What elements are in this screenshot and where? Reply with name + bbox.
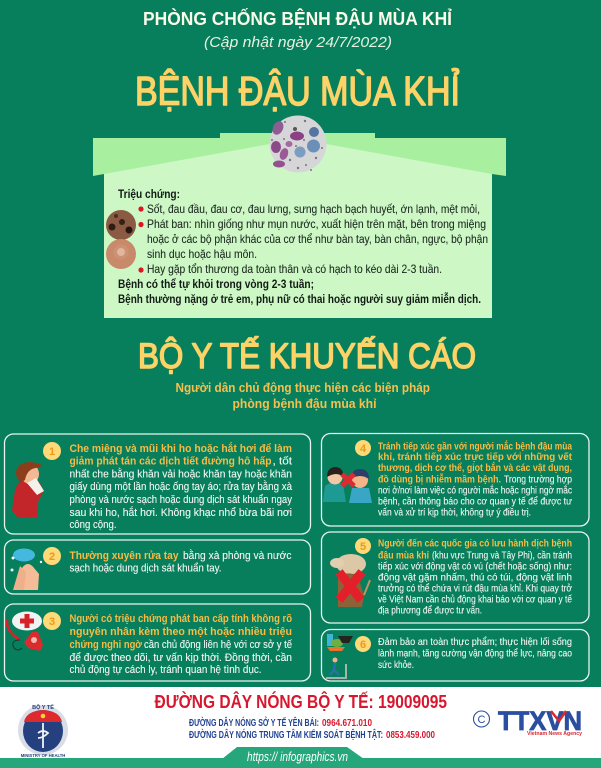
icon: two people with red cross [323, 467, 372, 503]
disease course notes: Bệnh có thể tự khỏi trong vòng 2-3 tuần; [118, 277, 314, 291]
symptom list: Hay gặp tổn thương da toàn thân và có hạch to kéo dài 2-3 tuần. [147, 262, 442, 276]
disease course notes [118, 277, 481, 306]
text: recommendation 5 [378, 538, 572, 616]
text: recommendation 3: Người có triệu chứng phát ban cấp tính không rõ [70, 613, 292, 625]
text: recommendation 6: sức khỏe. [378, 659, 414, 671]
symptom list: Phát ban: nhìn giống như mụn nước, xuất hiện trên mặt, bên trong miệng [147, 217, 486, 231]
bullet markers [138, 206, 144, 273]
hotline heading: ĐƯỜNG DÂY NÓNG BỘ Y TẾ: 19009095 [154, 691, 447, 712]
text: recommendation 3: để được theo dõi, tư vấn kịp thời. Đồng thời, cần [70, 652, 292, 664]
badge: 5: 5 [360, 541, 366, 553]
text: recommendation 1: , tốt [272, 456, 293, 468]
logo: ministry of health: MINISTRY OF HEALTH [21, 753, 65, 758]
photo: rash close-up [106, 239, 136, 269]
section subheading [176, 381, 430, 411]
text: recommendation 4 [378, 440, 572, 518]
header: update date: (Cập nhật ngày 24/7/2022) [204, 34, 392, 51]
text: recommendation 3: chủ động tự cách ly, tránh quan hệ tình dục. [70, 664, 262, 676]
icon: rodent with red cross [330, 554, 370, 607]
text: recommendation 3: nguyên nhân kèm theo một hoặc nhiều triệu [70, 626, 292, 638]
text: recommendation 4: vấn và xử trí kịp thời, không tự ý điều trị. [378, 506, 531, 518]
icon: virus micrograph [270, 116, 326, 172]
panel: recommendation 1 [4, 434, 310, 534]
panel: recommendation 4 [322, 434, 589, 526]
logo: copyright TTXVN: Vietnam News Agency [527, 731, 582, 737]
logo: ministry of health: BỘ Y TẾ [32, 703, 54, 711]
badge: 5 [355, 538, 371, 554]
symptoms heading: Triệu chứng: [118, 187, 180, 201]
text: recommendation 6 [378, 636, 572, 671]
text: recommendation 2: bằng xà phòng và nước [183, 549, 292, 562]
icon: phone and medical cross [7, 612, 43, 651]
text: recommendation 3: cần chủ động liên hệ với cơ sở y tế [144, 639, 293, 651]
text: recommendation 1: Che miệng và mũi khi ho hoặc hắt hơi để làm [70, 442, 292, 455]
panel body [104, 144, 492, 318]
text: recommendation 1: phòng và nước sạch hoặc dung dịch sát khuẩn ngay [70, 494, 292, 506]
website tab [222, 747, 364, 764]
logo: ministry of health [18, 703, 68, 758]
hotline numbers: ĐƯỜNG DÂY NÓNG SỞ Y TẾ YÊN BÁI: [189, 716, 319, 729]
badge: 3: 3 [49, 616, 55, 628]
text: recommendation 2: Thường xuyên rửa tay [70, 550, 179, 562]
badge: 2 [43, 547, 61, 565]
panel roof [93, 133, 506, 176]
text: recommendation 5: động vật gặm nhấm, thú có túi, động vật linh [378, 572, 572, 584]
hotline numbers: 0853.459.000 [386, 730, 435, 741]
logo: copyright TTXVN: C [478, 714, 486, 726]
text: recommendation 2: sạch hoặc dung dịch sát khuẩn tay. [70, 562, 222, 574]
hotline numbers: 0964.671.010 [322, 718, 372, 729]
text: recommendation 1: giấy dùng một lần hoặc ống tay áo; rửa tay bằng xà [70, 480, 293, 493]
panel: recommendation 5 [322, 532, 589, 623]
text: recommendation 2 [70, 549, 292, 574]
hotline numbers: ĐƯỜNG DÂY NÓNG TRUNG TÂM KIỂM SOÁT BỆNH TẬT: [189, 728, 383, 741]
panel: recommendation 6 [322, 630, 589, 681]
text: recommendation 1: công cộng. [70, 519, 116, 531]
symptom list: hoặc ở các bộ phận khác của cơ thể như bàn tay, bàn chân, ngực, bộ phận [147, 232, 488, 246]
badge: 3 [43, 612, 61, 630]
text: recommendation 4: đồ dùng bị nhiễm mầm bệnh. [378, 472, 501, 486]
main heading: BỆNH ĐẬU MÙA KHỈ [135, 68, 460, 114]
icon: person sneezing [12, 462, 44, 517]
badge: 4 [355, 440, 371, 456]
text: recommendation 5: tiếp xúc với động vật có vú (chết hoặc sống) như: [378, 560, 572, 572]
text: recommendation 1: nhất che bằng khăn vải hoặc khăn tay hoặc khăn [70, 468, 292, 480]
symptom list: sinh dục hoặc hậu môn. [147, 247, 257, 261]
badge: 1 [43, 442, 61, 460]
panel: recommendation 2 [4, 540, 310, 594]
footer band [0, 758, 601, 768]
text: recommendation 3: chứng nghi ngờ [70, 639, 143, 651]
hotline numbers [189, 716, 435, 741]
section heading: BỘ Y TẾ KHUYẾN CÁO [138, 336, 476, 376]
photo: skin lesions [106, 210, 136, 240]
panel: recommendation 3 [4, 604, 310, 681]
footer background [0, 687, 601, 759]
section subheading: phòng bệnh đậu mùa khỉ [232, 397, 377, 411]
badge: 2: 2 [49, 551, 55, 563]
text: recommendation 3 [70, 613, 293, 676]
badge: 6: 6 [360, 639, 366, 651]
logo: copyright TTXVN: TTXVN [498, 706, 582, 736]
disease course notes: Bệnh thường nặng ở trẻ em, phụ nữ có thai hoặc người suy giảm miễn dịch. [118, 292, 481, 306]
icon: washing hands [10, 548, 42, 590]
text: recommendation 1 [70, 442, 293, 531]
symptom list: Sốt, đau đầu, đau cơ, đau lưng, sưng hạch bạch huyết, ớn lạnh, mệt mỏi, [147, 202, 480, 216]
badge: 1: 1 [49, 446, 55, 458]
text: recommendation 4: thương, dịch cơ thể, giọt bắn và các vật dụng, [378, 461, 572, 474]
text: recommendation 1: sau khi ho, hắt hơi. Không khạc nhổ bừa bãi nơi [70, 506, 292, 519]
text: recommendation 4: khỉ, tránh tiếp xúc trực tiếp với những vết [378, 451, 572, 463]
panel: symptoms [93, 116, 506, 318]
badge: 4: 4 [360, 443, 367, 455]
header: top title: PHÒNG CHỐNG BỆNH ĐẬU MÙA KHỈ [143, 8, 452, 29]
footer [0, 687, 601, 768]
text: recommendation 6: Đảm bảo an toàn thực phẩm; thực hiện lối sống [378, 636, 572, 648]
text: recommendation 4: Trong trường hợp [504, 474, 572, 486]
symptom list [147, 202, 488, 276]
text: recommendation 4: bệnh, cần thông báo cho cơ quan y tế để được tư [378, 496, 572, 508]
text: recommendation 1: giảm phát tán các dịch tiết đường hô hấp [70, 456, 272, 468]
badge: 6 [355, 636, 371, 652]
section subheading: Người dân chủ động thực hiện các biện pháp [176, 381, 430, 395]
text: recommendation 5: đậu mùa khỉ [378, 550, 429, 562]
icon: food and treadmill [326, 634, 353, 678]
text: recommendation 5: địa phương để được tư vấn. [378, 604, 482, 616]
website tab: https:// infographics.vn [247, 749, 348, 764]
